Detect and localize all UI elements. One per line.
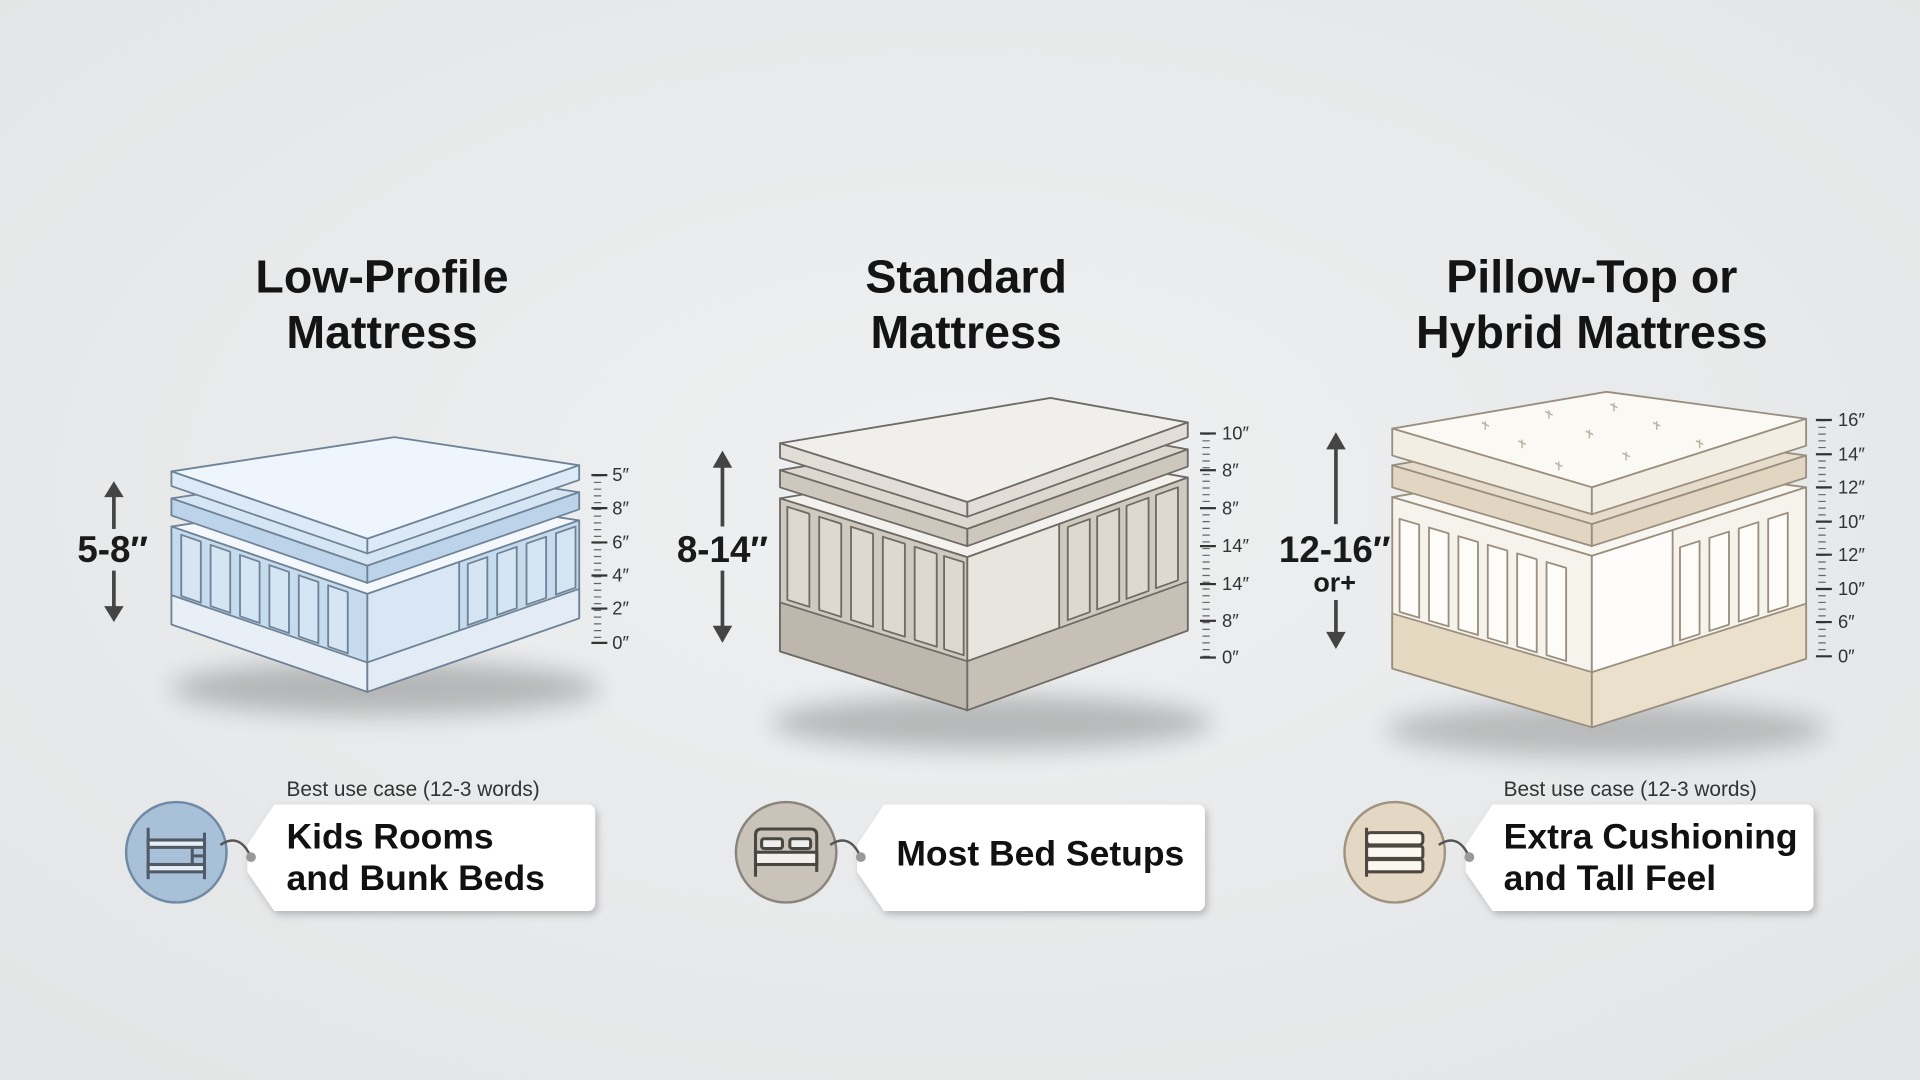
mattress: low-profile [171, 437, 600, 715]
height label: 8-14: 8-14″ [677, 529, 768, 570]
title: low-profile: Low-Profile [255, 251, 509, 303]
ruler: low-profile: 4″ [612, 565, 629, 586]
ruler: pillow-top: 12″ [1838, 476, 1865, 497]
tag: kids rooms [247, 804, 595, 911]
ruler: pillow-top: 10″ [1838, 578, 1865, 599]
title: standard: Standard [865, 251, 1067, 303]
ruler: low-profile: 0″ [612, 632, 629, 653]
height label: 12-16: or+ [1313, 567, 1356, 597]
ruler: pillow-top: 14″ [1838, 443, 1865, 464]
ruler: standard: 8″ [1222, 610, 1239, 631]
icon: bed [736, 802, 866, 902]
tag: extra cushioning [1466, 804, 1813, 911]
ruler: standard: 14″ [1222, 573, 1249, 594]
ruler: pillow-top: 16″ [1838, 409, 1865, 430]
ruler: low-profile: 8″ [612, 497, 629, 518]
title: pillow-top: Pillow-Top or [1446, 251, 1737, 303]
ruler: low-profile: 5″ [612, 464, 629, 485]
mattress: pillow-top [1386, 392, 1827, 757]
tag: most bed setups: Most Bed Setups [896, 834, 1184, 874]
title: pillow-top: Hybrid Mattress [1416, 306, 1768, 358]
caption: best use case 1: Best use case (12-3 words) [287, 778, 540, 801]
ruler: pillow-top [1816, 409, 1865, 666]
ruler: pillow-top: 6″ [1838, 611, 1855, 632]
title: pillow-top [1416, 251, 1768, 358]
mattress: standard [771, 398, 1212, 749]
ruler: standard: 8″ [1222, 459, 1239, 480]
tag: kids rooms: Kids Rooms [287, 817, 494, 857]
ruler: standard [1200, 423, 1249, 668]
tag: extra cushioning: Extra Cushioning [1504, 817, 1798, 857]
height label: 5-8 [77, 481, 148, 622]
ruler: pillow-top: 12″ [1838, 544, 1865, 565]
ruler: standard: 14″ [1222, 535, 1249, 556]
icon: pillow-top bed [1344, 802, 1474, 902]
title: standard [865, 251, 1067, 358]
ruler: standard: 10″ [1222, 423, 1249, 444]
height label: 12-16 [1279, 432, 1390, 649]
tag: most bed setups [857, 804, 1205, 911]
tag: extra cushioning: and Tall Feel [1504, 858, 1716, 898]
ruler: pillow-top: 0″ [1838, 645, 1855, 666]
ruler: standard: 0″ [1222, 647, 1239, 668]
ruler: low-profile: 2″ [612, 598, 629, 619]
height label: 12-16: 12-16″ [1279, 529, 1390, 570]
title: standard: Mattress [870, 306, 1062, 358]
tag: kids rooms: and Bunk Beds [287, 858, 545, 898]
title: low-profile: Mattress [286, 306, 478, 358]
height label: 8-14 [677, 451, 768, 643]
title: low-profile [255, 251, 509, 358]
ruler: pillow-top: 10″ [1838, 511, 1865, 532]
ruler: low-profile: 6″ [612, 532, 629, 553]
ruler: standard: 8″ [1222, 497, 1239, 518]
ruler: low-profile [591, 464, 629, 653]
caption: best use case 3: Best use case (12-3 words) [1504, 778, 1757, 801]
height label: 5-8: 5-8″ [77, 529, 148, 570]
icon: bunk bed [126, 802, 256, 902]
